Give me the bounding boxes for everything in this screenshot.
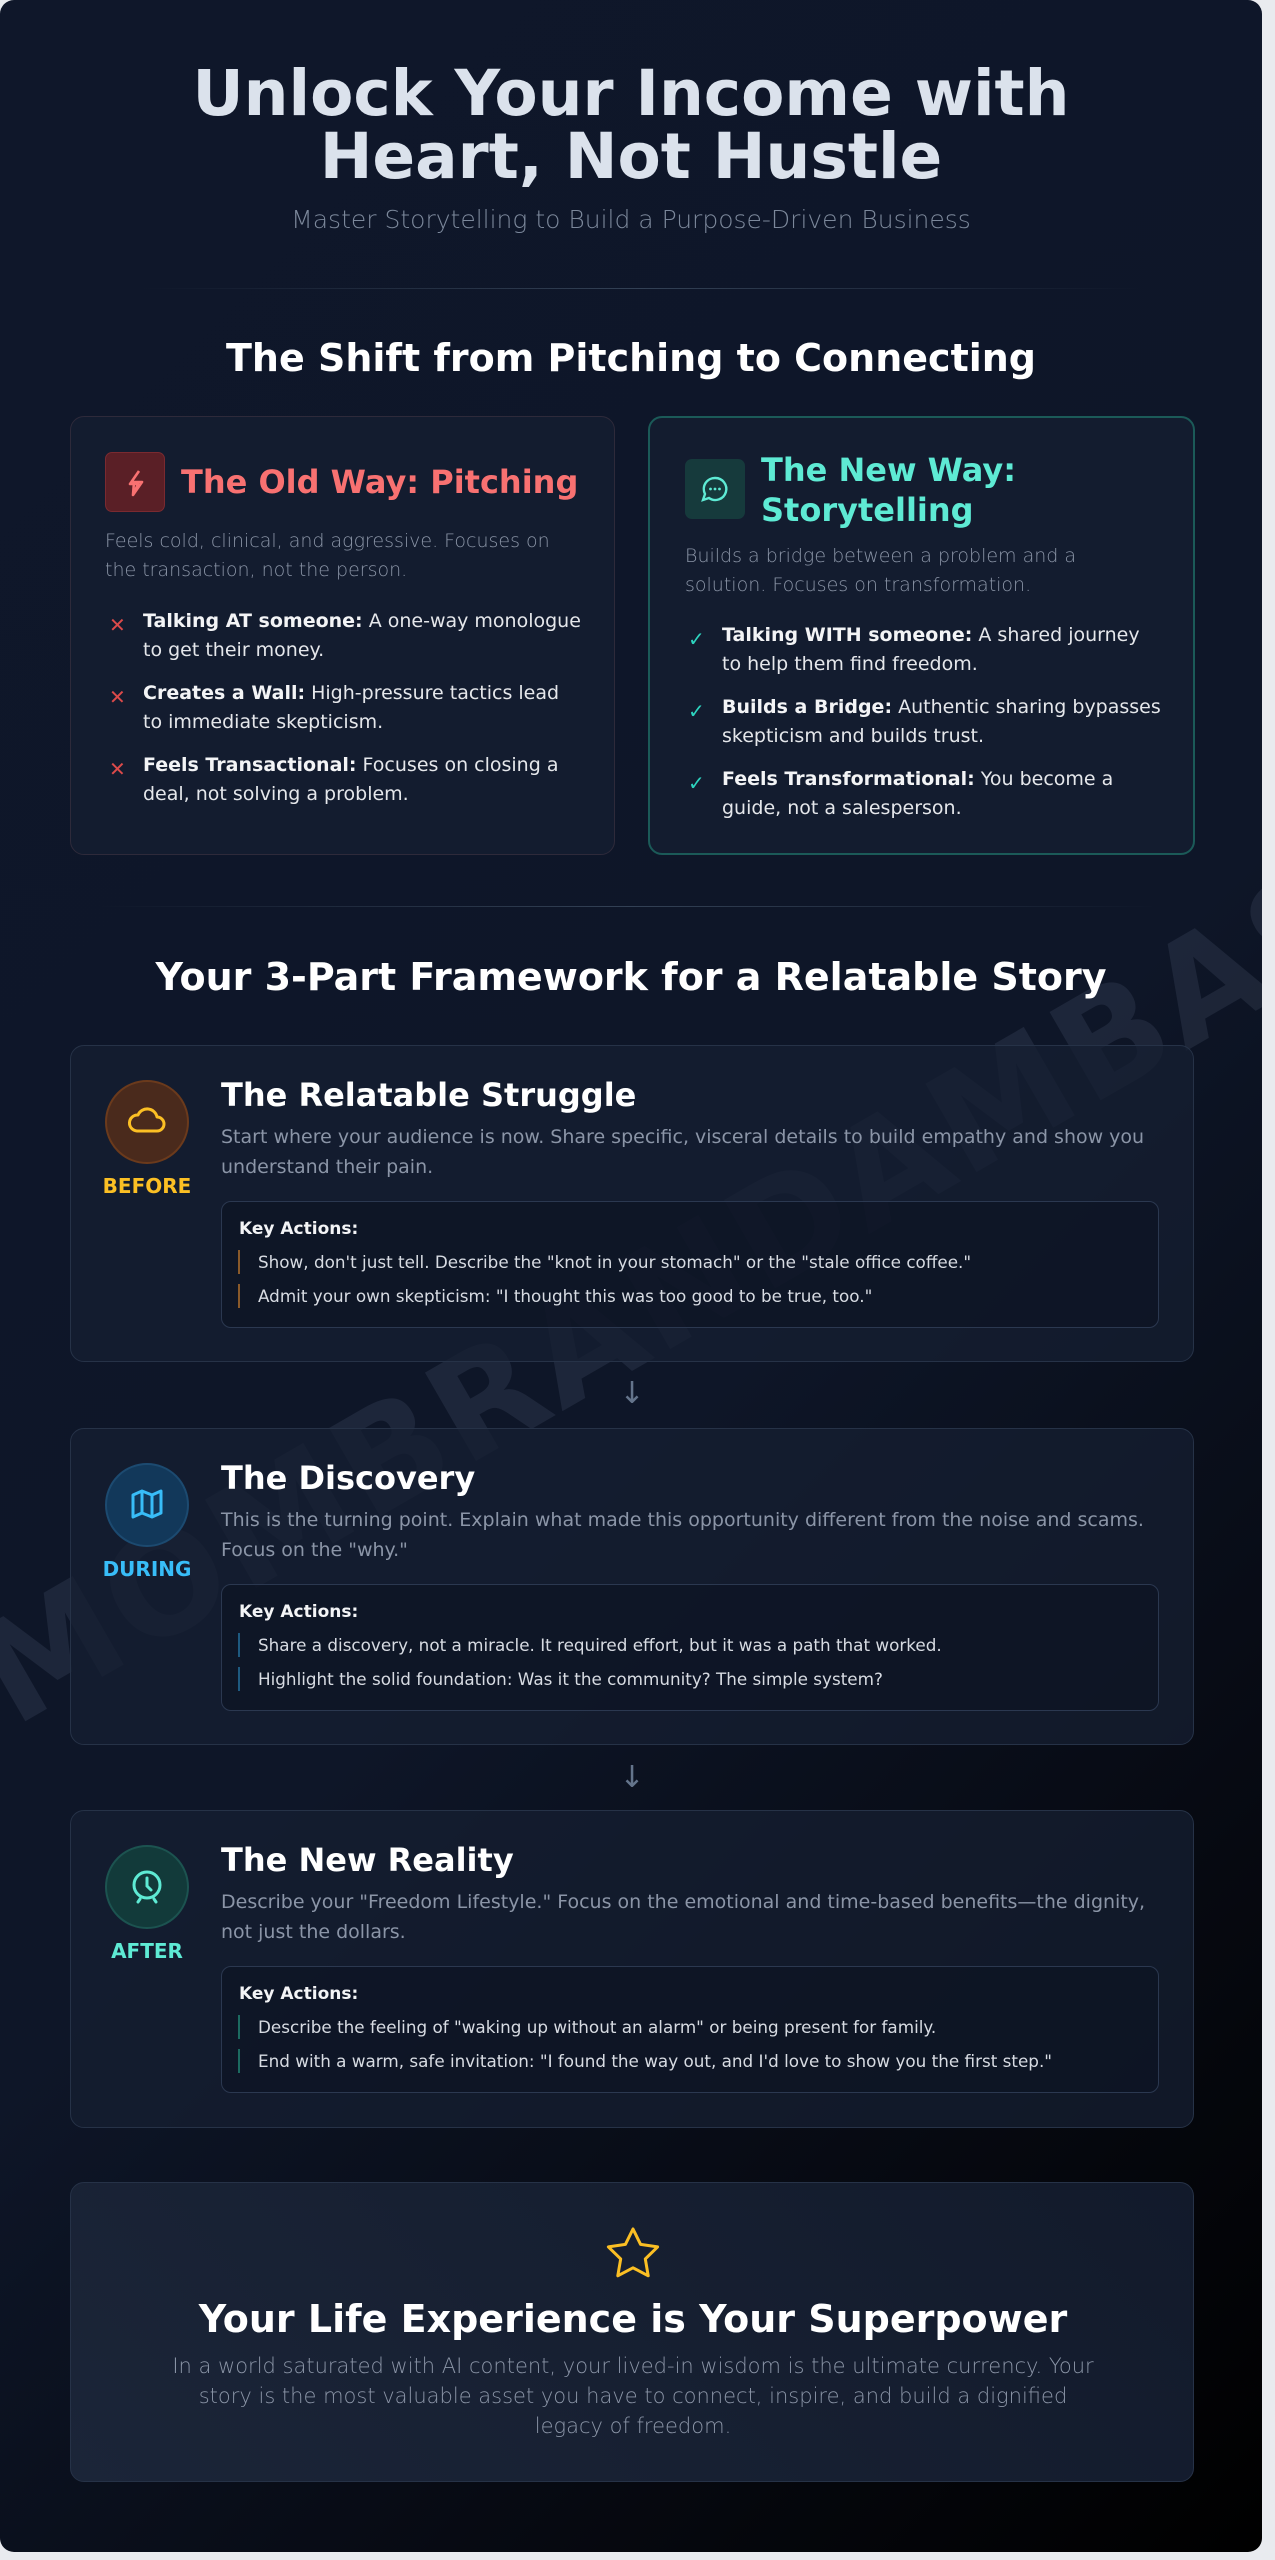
key actions (221, 1966, 1159, 2093)
heading: framework: Your 3-Part Framework for a Relatable Story (155, 955, 1107, 999)
heading: shift: The Shift from Pitching to Connecting (226, 336, 1036, 380)
bullets: to immediate skepticism. (143, 711, 383, 733)
key actions: Key Actions: (239, 1219, 358, 1239)
icon: map (105, 1463, 189, 1547)
panel: old way (70, 416, 615, 855)
bullets: ✕ (109, 613, 126, 637)
bullets (109, 610, 581, 805)
description: Builds a bridge between a problem and a solution. Focuses on transformation. (685, 545, 1076, 596)
bullets: Talking WITH someone: A shared journey (722, 624, 1140, 646)
icon: star (606, 2227, 660, 2278)
bullets: ✓ (688, 699, 705, 723)
step title: The Relatable Struggle (221, 1076, 636, 1114)
heading: The New Way: (761, 451, 1016, 489)
description: Feels cold, clinical, and aggressive. Focuses on the transaction, not the person. (105, 530, 550, 581)
title: Heart, Not Hustle (320, 120, 942, 193)
bullets: skepticism and builds trust. (722, 725, 984, 747)
key actions: Key Actions: (239, 1984, 358, 2004)
key actions (221, 1201, 1159, 1328)
bullets (688, 624, 1161, 819)
bullets: Builds a Bridge: Authentic sharing bypasses (722, 696, 1161, 718)
text: In a world saturated with AI content, your lived-in wisdom is the ultimate currency. Your story is the most valuable asset you have to connect, inspire, and build a dignified legacy of freedom. (172, 2354, 1094, 2438)
title (192, 57, 1070, 193)
bullets: ✕ (109, 757, 126, 781)
bullets: to help them find freedom. (722, 653, 978, 675)
bullets: guide, not a salesperson. (722, 797, 962, 819)
subtitle: Master Storytelling to Build a Purpose-Driven Business (291, 205, 971, 234)
bullets: Feels Transactional: Focuses on closing a (143, 754, 558, 776)
step title: The New Reality (221, 1841, 514, 1879)
icon: clock (105, 1845, 189, 1929)
step title: The Discovery (221, 1459, 475, 1497)
bullets: Creates a Wall: High-pressure tactics lead (143, 682, 559, 704)
key actions: Show, don't just tell. Describe the "knot in your stomach" or the "stale office coffee." (258, 1252, 971, 1272)
arrow: ↓ (619, 1376, 645, 1411)
heading: Your Life Experience is Your Superpower (199, 2297, 1067, 2341)
key actions: Highlight the solid foundation: Was it the community? The simple system? (258, 1669, 883, 1689)
label: before: BEFORE (103, 1174, 191, 1198)
panel: conclusion (70, 2182, 1194, 2482)
panel: step 1 (70, 1045, 1194, 1362)
bullets: deal, not solving a problem. (143, 783, 409, 805)
icon: chat (685, 459, 745, 519)
panel: step 3 (70, 1810, 1194, 2128)
bullets: ✕ (109, 685, 126, 709)
step desc: Start where your audience is now. Share specific, visceral details to build empathy and show you understand their pain. (221, 1126, 1144, 1178)
heading (761, 451, 1016, 529)
bullets: Talking AT someone: A one-way monologue (143, 610, 581, 632)
bullets: Feels Transformational: You become a (722, 768, 1113, 790)
key actions: Describe the feeling of "waking up without an alarm" or being present for family. (258, 2017, 936, 2037)
bullets: ✓ (688, 627, 705, 651)
icon: lightning (105, 452, 165, 512)
step desc: Describe your "Freedom Lifestyle." Focus on the emotional and time-based benefits—the dignity, not just the dollars. (221, 1891, 1145, 1943)
arrow: ↓ (619, 1760, 645, 1795)
heading: The Old Way: Pitching (181, 463, 578, 501)
label: during: DURING (103, 1557, 191, 1581)
bullets: ✓ (688, 771, 705, 795)
key actions (221, 1584, 1159, 1711)
heading: Storytelling (761, 491, 974, 529)
step desc: This is the turning point. Explain what made this opportunity different from the noise and scams. Focus on the "why." (221, 1509, 1144, 1561)
panel: step 2 (70, 1428, 1194, 1745)
bullets: to get their money. (143, 639, 324, 661)
key actions: Share a discovery, not a miracle. It required effort, but it was a path that worked. (258, 1635, 942, 1655)
key actions: End with a warm, safe invitation: "I found the way out, and I'd love to show you the first step." (258, 2051, 1052, 2071)
icon: cloud (105, 1080, 189, 1164)
panel: new way (648, 416, 1195, 855)
key actions: Admit your own skepticism: "I thought this was too good to be true, too." (258, 1286, 872, 1306)
key actions: Key Actions: (239, 1602, 358, 1622)
title: Unlock Your Income with (192, 57, 1070, 130)
label: after: AFTER (111, 1939, 183, 1963)
